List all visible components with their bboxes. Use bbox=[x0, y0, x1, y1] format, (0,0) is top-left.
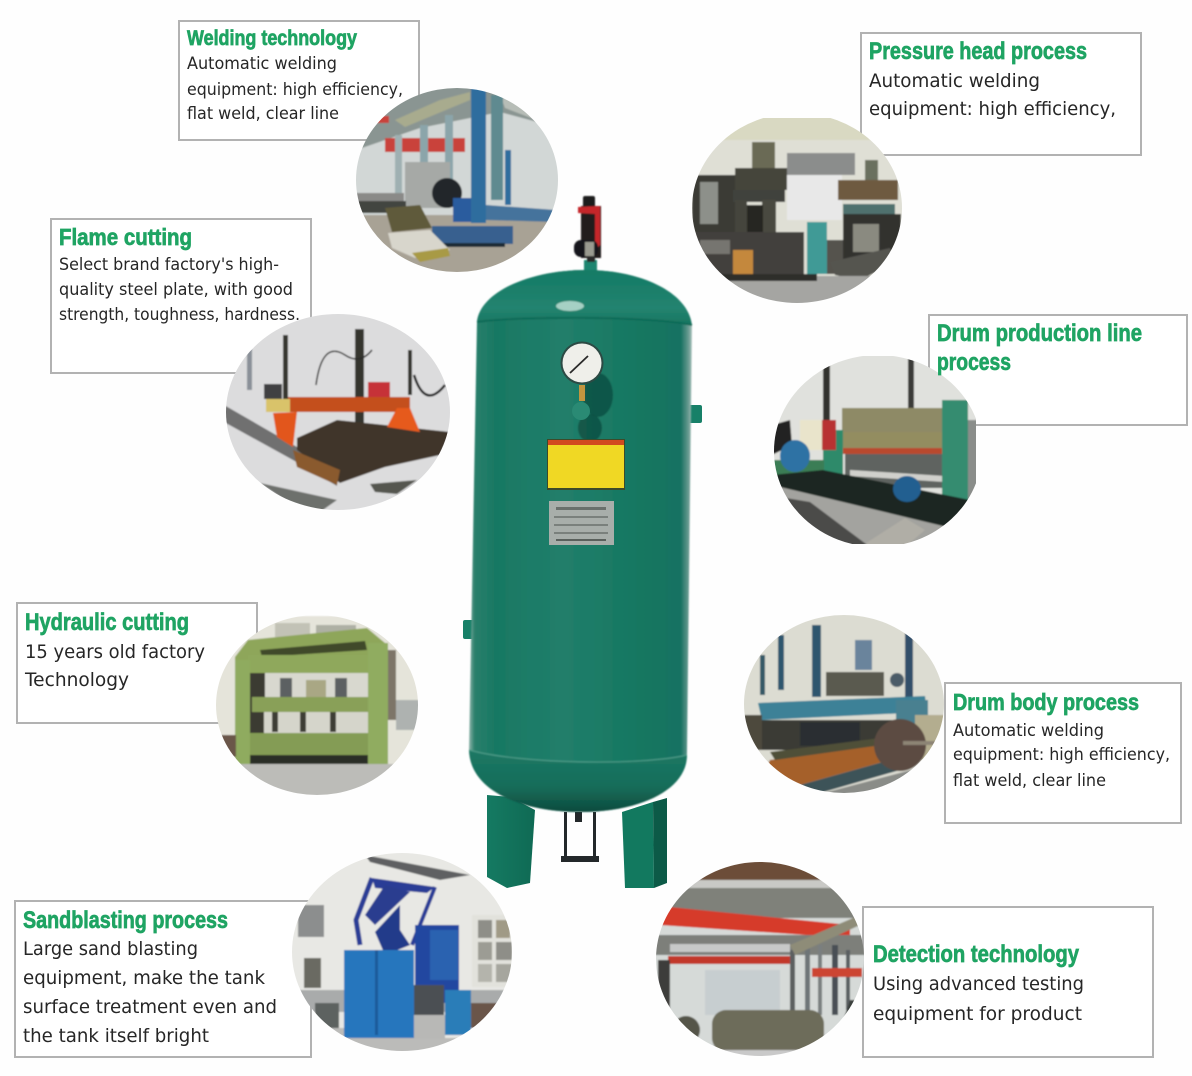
text: drum body process: Automatic welding bbox=[953, 721, 1104, 741]
text: hydraulic cutting: 15 years old factory bbox=[25, 641, 205, 663]
text: hydraulic cutting: Technology bbox=[24, 669, 129, 691]
panel: pressure head process box bbox=[861, 33, 1141, 155]
text: welding technology bbox=[187, 27, 403, 124]
nameplate bbox=[549, 501, 614, 545]
text: detection technology: Detection technology bbox=[873, 941, 1080, 968]
photo: drum body machine circle bbox=[742, 614, 946, 796]
side nozzle right bbox=[687, 405, 702, 423]
panel: welding technology box bbox=[179, 21, 419, 140]
text: drum body process: flat weld, clear line bbox=[953, 771, 1106, 791]
text: drum body process: Drum body process bbox=[953, 689, 1139, 715]
text: sandblasting process: the tank itself bright bbox=[23, 1025, 209, 1047]
illustration: green air receiver tank bbox=[463, 196, 702, 888]
panel: detection technology box bbox=[863, 907, 1153, 1057]
text: welding technology: flat weld, clear line bbox=[187, 104, 339, 124]
text: drum production line process: process bbox=[937, 349, 1011, 376]
side nozzle left bbox=[463, 620, 478, 639]
photo: flame cutting machine circle bbox=[224, 312, 452, 512]
text: sandblasting process: Sandblasting process bbox=[23, 907, 228, 934]
panel: sandblasting process box bbox=[15, 901, 311, 1057]
drain bracket bbox=[561, 812, 599, 862]
yellow warning label bbox=[547, 439, 625, 490]
text: pressure head process: Automatic welding bbox=[869, 70, 1040, 92]
safety valve bbox=[574, 196, 601, 274]
text: pressure head process: Pressure head process bbox=[869, 38, 1087, 65]
text: detection technology: Using advanced testing bbox=[873, 973, 1084, 995]
pressure gauge bbox=[560, 342, 604, 420]
text: flame cutting: strength, toughness, hardness. bbox=[59, 305, 300, 325]
panel: drum body process box bbox=[945, 683, 1181, 823]
text: drum production line process: Drum production line bbox=[937, 320, 1142, 347]
text: welding technology: equipment: high efficiency, bbox=[187, 80, 403, 100]
text: detection technology bbox=[873, 941, 1084, 1025]
text: flame cutting: quality steel plate, with good bbox=[59, 280, 293, 300]
photo: welding machine circle bbox=[350, 85, 566, 275]
text: pressure head process bbox=[869, 38, 1116, 120]
text: flame cutting bbox=[59, 224, 300, 325]
text: flame cutting: Select brand factory's high- bbox=[59, 255, 279, 275]
text: drum body process bbox=[953, 689, 1170, 791]
text: detection technology: equipment for product bbox=[873, 1003, 1082, 1025]
text: hydraulic cutting: Hydraulic cutting bbox=[25, 609, 189, 636]
panel: drum production line box bbox=[929, 315, 1187, 425]
tank body bbox=[469, 270, 692, 812]
text: pressure head process: equipment: high efficiency, bbox=[869, 98, 1116, 120]
photo: sandblasting machine circle bbox=[290, 850, 515, 1056]
photo: plate rolling machine circle bbox=[770, 352, 980, 547]
panel: flame cutting box bbox=[51, 219, 311, 373]
panel: hydraulic cutting box bbox=[17, 603, 257, 723]
text: sandblasting process: surface treatment even and bbox=[23, 996, 277, 1018]
text: drum production line process bbox=[937, 320, 1142, 376]
text: sandblasting process: Large sand blasting bbox=[23, 938, 198, 960]
text: welding technology: Automatic welding bbox=[187, 54, 337, 74]
text: drum body process: equipment: high efficiency, bbox=[953, 745, 1170, 765]
text: sandblasting process: equipment, make the tank bbox=[23, 967, 265, 989]
text: hydraulic cutting bbox=[24, 609, 205, 691]
text: flame cutting: Flame cutting bbox=[59, 224, 192, 250]
text: sandblasting process bbox=[23, 907, 277, 1047]
photo: hydraulic presses circle bbox=[690, 115, 905, 306]
photo: hydraulic cutting press circle bbox=[214, 610, 421, 796]
support leg right bbox=[622, 798, 667, 888]
support leg left bbox=[487, 795, 535, 888]
photo: testing workshop circle bbox=[654, 860, 866, 1060]
text: welding technology: Welding technology bbox=[187, 27, 357, 50]
